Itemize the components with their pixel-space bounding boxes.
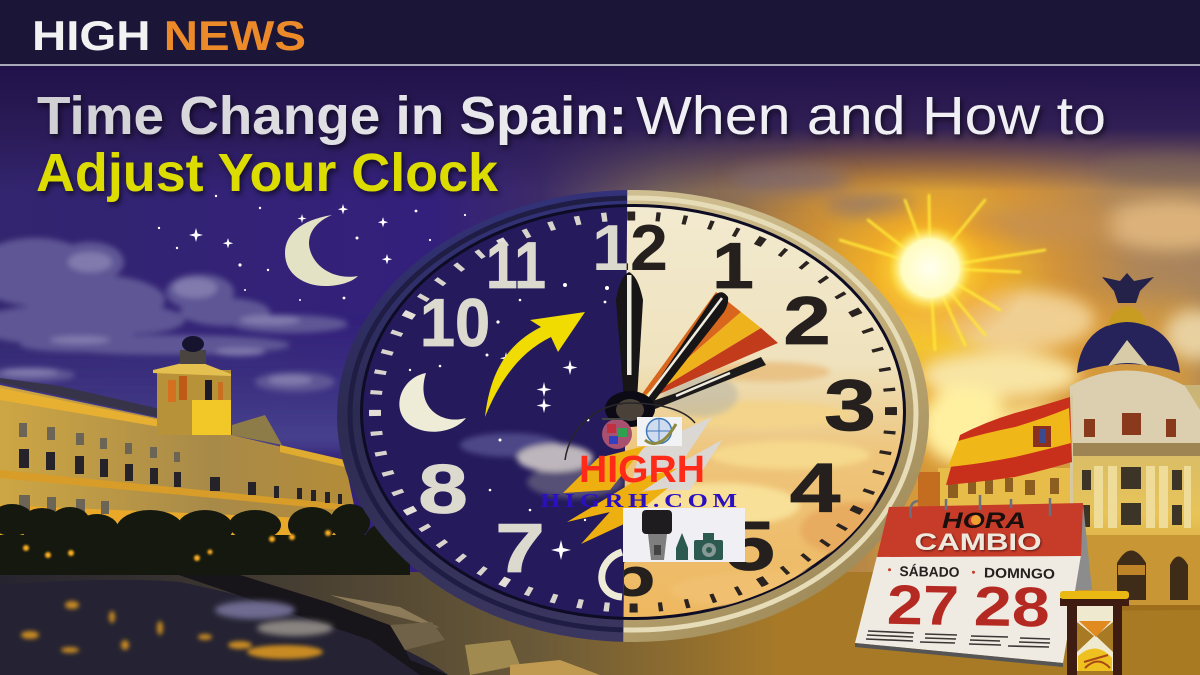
palace tower bbox=[153, 336, 231, 435]
numeral 6 bbox=[598, 548, 653, 600]
numeral 6: 6 bbox=[608, 537, 656, 611]
clouds: day sky bbox=[730, 156, 1200, 465]
numerals: 3 bbox=[824, 364, 876, 446]
moon: night sky bbox=[285, 215, 358, 286]
icon: microphone bbox=[642, 510, 672, 560]
numerals: 8 bbox=[418, 450, 468, 529]
header bar bbox=[0, 0, 1200, 66]
globe flags emblem bbox=[602, 418, 632, 449]
title: When and How to bbox=[636, 86, 1106, 146]
hourglass bbox=[1060, 591, 1129, 675]
yellow arrow bbox=[485, 312, 585, 417]
stars bbox=[158, 195, 466, 301]
calendar heading bbox=[914, 508, 1042, 556]
numerals: 2 bbox=[783, 283, 831, 359]
numeral 12: 12 bbox=[592, 212, 668, 285]
calendar rings bbox=[910, 495, 1050, 518]
numerals: 10 bbox=[420, 285, 490, 360]
clock face: day bbox=[624, 207, 903, 617]
clock face: night bbox=[363, 207, 627, 617]
clock bbox=[337, 190, 929, 642]
calendar header bbox=[877, 503, 1083, 557]
trees bbox=[0, 504, 410, 575]
calendar dates: DOMNGO bbox=[984, 564, 1055, 582]
ground bbox=[0, 572, 1200, 675]
eagle bbox=[1102, 273, 1154, 303]
logo: HIGH NEWS: HIGH NEWS bbox=[32, 12, 306, 59]
calendar dates: 28 bbox=[973, 574, 1050, 639]
numerals: 11 bbox=[486, 229, 546, 303]
flag fan bbox=[634, 292, 778, 405]
title: Time Change in Spain: bbox=[37, 86, 627, 146]
building: Metropolis bbox=[918, 273, 1200, 605]
calendar heading: CAMBIO bbox=[914, 529, 1042, 556]
icon: fountain pen bbox=[676, 533, 688, 560]
numerals bbox=[418, 229, 876, 588]
stars on face bbox=[409, 283, 609, 560]
media icons box bbox=[623, 508, 745, 562]
calendar heading: HORA bbox=[942, 508, 1026, 533]
moon on face bbox=[399, 373, 466, 432]
calendar back leaf bbox=[1066, 503, 1092, 650]
lightning bolts bbox=[563, 417, 722, 544]
watermark logo bbox=[540, 403, 745, 562]
dome bbox=[1077, 322, 1180, 373]
numeral 12: 12 bbox=[592, 212, 668, 285]
HIGRH wordmark: HIGRH bbox=[579, 449, 705, 491]
sun bbox=[830, 188, 1045, 350]
HIGRH.COM wordmark: HIGRH.COM bbox=[540, 490, 742, 512]
title bbox=[36, 86, 1106, 203]
calendar dates: SÁBADO bbox=[899, 563, 960, 580]
UN-style emblem bbox=[637, 417, 682, 446]
calendar dates: 27 bbox=[886, 573, 959, 637]
title: Adjust Your Clock bbox=[36, 143, 499, 203]
numerals: 1 bbox=[712, 230, 754, 302]
palace bbox=[0, 336, 355, 535]
calendar dates bbox=[886, 563, 1055, 639]
clock rim bbox=[337, 190, 929, 642]
calendar page bbox=[855, 555, 1081, 663]
numeral 12 bbox=[596, 224, 666, 270]
numerals: 7 bbox=[495, 509, 545, 588]
calendar bbox=[855, 495, 1092, 667]
icon: camera bbox=[694, 533, 723, 560]
clouds inside face bbox=[460, 362, 920, 610]
clock hands bbox=[605, 272, 766, 427]
flag of Spain bbox=[946, 395, 1073, 505]
calendar text lines bbox=[866, 631, 1050, 647]
clouds: night sky bbox=[0, 238, 348, 392]
numerals: 5 bbox=[725, 507, 775, 586]
numerals: 4 bbox=[790, 450, 840, 528]
tick marks bbox=[375, 216, 891, 608]
